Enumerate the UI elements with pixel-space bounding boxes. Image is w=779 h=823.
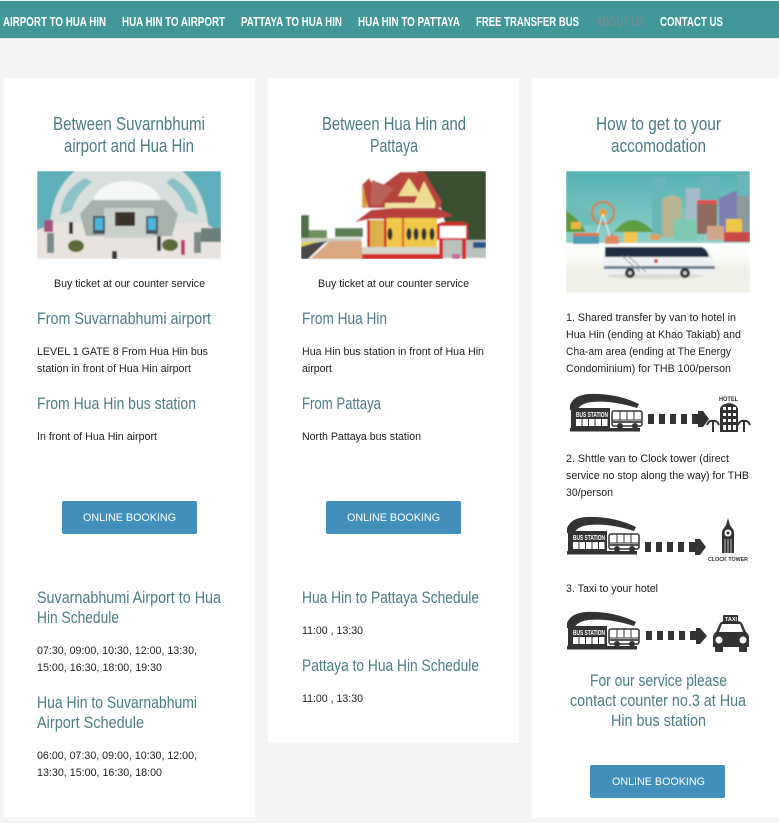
heading: between Suvarnabhumi and Hua Hin: airport and Hua Hin xyxy=(64,136,194,156)
text: airport pickup location: station in front of Hua Hin airport xyxy=(37,363,191,375)
heading: between Hua Hin and Pattaya: Between Hua Hin and xyxy=(322,114,466,134)
text: option 1 shared transfer: Cha-am area (ending at The Energy xyxy=(566,346,731,358)
icon: bus station to taxi: TAXI xyxy=(725,617,737,623)
text: airport to Hua Hin times xyxy=(37,645,197,674)
text: option 1 shared transfer: 1. Shared transfer by van to hotel in xyxy=(566,312,736,324)
text: Hua Hin to airport times xyxy=(37,750,197,779)
subheading: from Suvarnabhumi airport: From Suvarnabhumi airport xyxy=(37,309,211,328)
subheading: from Hua Hin: From Hua Hin xyxy=(302,309,387,328)
subheading: Hua Hin to airport schedule: Hua Hin to Suvarnabhumi xyxy=(37,693,197,712)
button: online booking xyxy=(326,501,461,534)
navigation bar: HUA HIN TO AIRPORT xyxy=(122,15,225,29)
navigation bar: FREE TRANSFER BUS xyxy=(476,15,579,29)
heading: how to get to your accomodation: How to get to your xyxy=(596,114,721,134)
text: option 1 shared transfer: Hua Hin (ending at Khao Takiab) and xyxy=(566,329,741,341)
text: contact counter xyxy=(570,671,746,730)
icon: bus station to clock tower: CLOCK TOWER xyxy=(708,557,748,563)
button: online booking: ONLINE BOOKING xyxy=(347,512,440,524)
text: Hua Hin to airport times: 06:00, 07:30, 09:00, 10:30, 12:00, xyxy=(37,750,197,762)
icon: bus station to clock tower: BUS STATION xyxy=(573,535,605,542)
subheading: Hua Hin to airport schedule: Airport Schedule xyxy=(37,713,144,732)
text: option 2 shuttle van: 2. Shttle van to Clock tower (direct xyxy=(566,453,729,465)
text: contact counter: For our service please xyxy=(590,671,727,690)
subheading: from Pattaya: From Pattaya xyxy=(302,394,381,413)
heading: how to get to your accomodation: accomodation xyxy=(611,136,706,156)
text: buy ticket: Buy ticket at our counter service xyxy=(318,278,469,290)
text: option 1 shared transfer: Condominium) for THB 100/person xyxy=(566,363,731,375)
panel: how to get to your accommodation xyxy=(532,78,779,818)
subheading: Hua Hin to airport schedule xyxy=(37,693,197,732)
photo: airport terminal xyxy=(37,171,221,259)
navigation bar: ABOUT US xyxy=(596,15,644,29)
button: online booking xyxy=(590,765,725,798)
text: bus station location: In front of Hua Hin airport xyxy=(37,431,157,443)
illustration: city and coach bus xyxy=(566,171,750,293)
navigation bar: CONTACT US xyxy=(660,15,723,29)
subheading: Pattaya to Hua Hin schedule: Pattaya to Hua Hin Schedule xyxy=(302,656,479,675)
text: option 3 taxi: 3. Taxi to your hotel xyxy=(566,583,658,595)
navigation bar xyxy=(0,1,779,39)
button: online booking: ONLINE BOOKING xyxy=(612,776,705,788)
button: online booking xyxy=(62,501,197,534)
icon: bus station to taxi xyxy=(567,612,749,652)
text: airport pickup location: LEVEL 1 GATE 8 From Hua Hin bus xyxy=(37,346,208,358)
navigation bar: AIRPORT TO HUA HIN xyxy=(3,15,106,29)
text: contact counter: Hin bus station xyxy=(611,711,706,730)
subheading: airport to Hua Hin schedule: Hin Schedule xyxy=(37,608,119,627)
photo: Hua Hin railway station xyxy=(301,171,486,259)
text: Hua Hin pickup location xyxy=(302,346,484,375)
text: Pattaya pickup location: North Pattaya bus station xyxy=(302,431,421,443)
panel: Hua Hin and Pattaya xyxy=(268,78,519,743)
text: Hua Hin pickup location: airport xyxy=(302,363,332,375)
subheading: from Hua Hin bus station: From Hua Hin bus station xyxy=(37,394,196,413)
text: airport pickup location xyxy=(37,346,208,375)
heading: between Hua Hin and Pattaya xyxy=(322,114,466,156)
navigation bar: HUA HIN TO PATTAYA xyxy=(358,15,460,29)
text: Hua Hin pickup location: Hua Hin bus station in front of Hua Hin xyxy=(302,346,484,358)
icon: bus station to hotel xyxy=(570,394,750,432)
panel: Suvarnabhumi airport and Hua Hin xyxy=(4,78,255,817)
text: contact counter: contact counter no.3 at Hua xyxy=(570,691,746,710)
heading: between Suvarnabhumi and Hua Hin: Between Suvarnbhumi xyxy=(53,114,205,134)
subheading: Hua Hin to Pattaya schedule: Hua Hin to Pattaya Schedule xyxy=(302,588,479,607)
text: buy ticket: Buy ticket at our counter service xyxy=(54,278,205,290)
text: airport to Hua Hin times: 15:00, 16:30, 18:00, 19:30 xyxy=(37,662,162,674)
icon: bus station to clock tower xyxy=(567,517,748,563)
icon: bus station to hotel: HOTEL xyxy=(719,397,738,403)
icon: bus station to taxi: BUS STATION xyxy=(573,630,605,637)
heading: how to get to your accomodation xyxy=(596,114,721,156)
heading: between Hua Hin and Pattaya: Pattaya xyxy=(370,136,419,156)
text: option 1 shared transfer xyxy=(566,312,741,375)
text: Hua Hin to airport times: 13:30, 15:00, 16:30, 18:00 xyxy=(37,767,162,779)
icon: bus station to hotel: BUS STATION xyxy=(576,412,608,419)
subheading: airport to Hua Hin schedule: Suvarnabhumi Airport to Hua xyxy=(37,588,221,607)
text: option 2 shuttle van: 30/person xyxy=(566,487,613,499)
button: online booking: ONLINE BOOKING xyxy=(83,512,176,524)
text: airport to Hua Hin times: 07:30, 09:00, 10:30, 12:00, 13:30, xyxy=(37,645,197,657)
navigation bar: PATTAYA TO HUA HIN xyxy=(241,15,342,29)
subheading: airport to Hua Hin schedule xyxy=(37,588,221,627)
text: option 2 shuttle van: service no stop along the way) for THB xyxy=(566,470,749,482)
heading: between Suvarnabhumi and Hua Hin xyxy=(53,114,205,156)
text: Hua Hin to Pattaya times: 11:00 , 13:30 xyxy=(302,625,363,637)
text: option 2 shuttle van xyxy=(566,453,749,499)
text: Pattaya to Hua Hin times: 11:00 , 13:30 xyxy=(302,693,363,705)
